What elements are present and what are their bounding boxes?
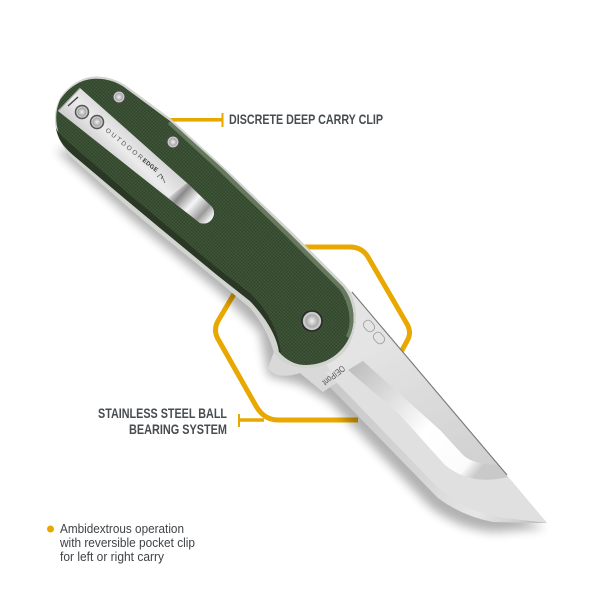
clip logo [104, 127, 165, 183]
handle scale [56, 79, 354, 365]
bullet note: for left or right carry [60, 549, 164, 564]
blade [268, 285, 547, 523]
handle upper bevel [168, 121, 354, 338]
lower flat [325, 370, 547, 523]
pivot screw [302, 311, 322, 331]
fuller grind [348, 361, 508, 480]
bullet note: Ambidextrous operation [60, 521, 184, 536]
heading: ball bearing system: STAINLESS STEEL BALL [98, 405, 227, 421]
handle liner [55, 77, 356, 368]
pocket clip [58, 88, 214, 224]
knife [55, 77, 547, 532]
heading: ball bearing system [98, 405, 227, 437]
bullet note: with reversible pocket clip [59, 535, 195, 550]
clip logo: OUTDOOR [104, 127, 144, 162]
blade stamp: logo: OEIPont [320, 363, 347, 388]
spine edge [352, 292, 507, 475]
heading: ball bearing system: BEARING SYSTEM [129, 421, 227, 437]
blade stamp: pills [362, 319, 386, 345]
knife shadow [56, 150, 545, 532]
heading: deep carry clip: DISCRETE DEEP CARRY CLIP [229, 111, 383, 127]
flipper [268, 352, 337, 392]
clip bend highlight [168, 183, 214, 224]
bullet note [47, 521, 195, 564]
handle screws [113, 91, 179, 148]
lower bevel [330, 383, 547, 523]
callout connector: clip [168, 113, 224, 127]
clip logo: EDGE [141, 158, 159, 174]
handle lower dark bevel [56, 128, 281, 352]
clip screws [76, 106, 104, 128]
callout connector: ball bearing hexagon [216, 247, 410, 427]
